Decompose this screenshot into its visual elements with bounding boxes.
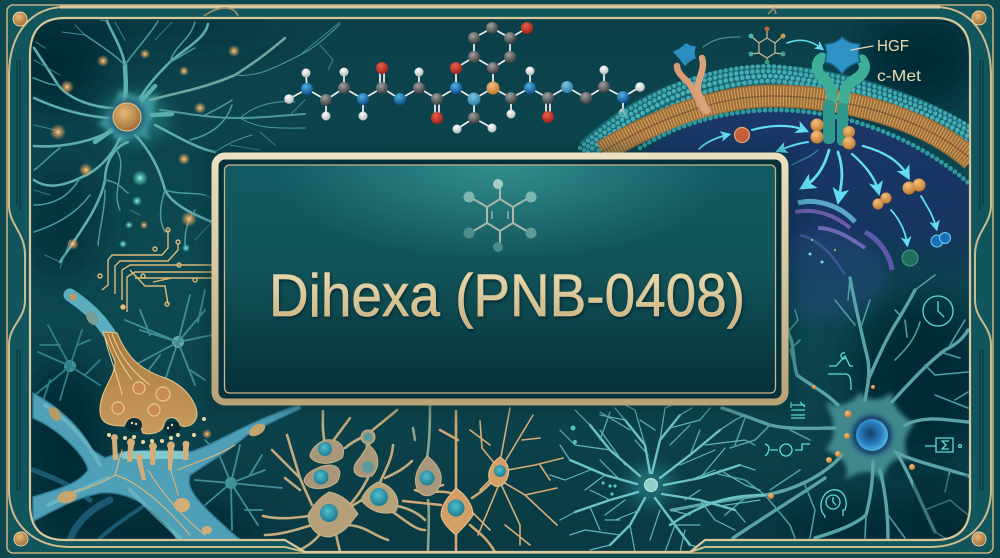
organelles: golgi and nucleus (788, 198, 894, 322)
circuit traces (98, 228, 212, 312)
title card (205, 148, 795, 412)
icon: hexagonal molecule (464, 179, 536, 252)
neuron: central cyan branching neuron (550, 405, 765, 552)
molecule: peptide chain structure (284, 22, 645, 134)
icon: head with clock (821, 490, 846, 518)
icon: bars (791, 402, 805, 418)
title: Dihexa (PNB-0408) (269, 262, 745, 329)
axon and dendrite network with synapse (33, 294, 300, 540)
receptor: c-Met dimer with HGF star (810, 37, 873, 150)
neuron: right blue-nucleus neuron (672, 275, 968, 538)
receptor: left inactive receptor with ligand (674, 44, 707, 111)
icon: pathway glyph (828, 353, 853, 390)
neuron: top-left gold-nucleus neuron (33, 20, 340, 268)
icon: small ring molecule over membrane (749, 27, 785, 64)
artefact: darker patch in lower right (913, 475, 968, 539)
synaptic bouton (100, 332, 212, 444)
icon: logic symbol (765, 444, 810, 456)
icon: sigma box (925, 438, 962, 452)
signalling arrows and proteins (699, 37, 950, 266)
neuron: faint small bottom (195, 440, 282, 530)
neuron: faint small left (35, 325, 100, 410)
label: HGF: HGF (877, 38, 909, 55)
glowing particles near top-left neuron (50, 45, 240, 252)
cell: membrane and interior (578, 64, 969, 270)
background small neurons left (35, 290, 282, 530)
label: c-Met: c-Met (877, 68, 922, 85)
neurons: gold neurons bottom centre (263, 406, 563, 552)
icons: memory and cognition glyphs (765, 296, 962, 518)
icon: clock (923, 296, 953, 326)
neuron: faint small upper (125, 290, 212, 385)
